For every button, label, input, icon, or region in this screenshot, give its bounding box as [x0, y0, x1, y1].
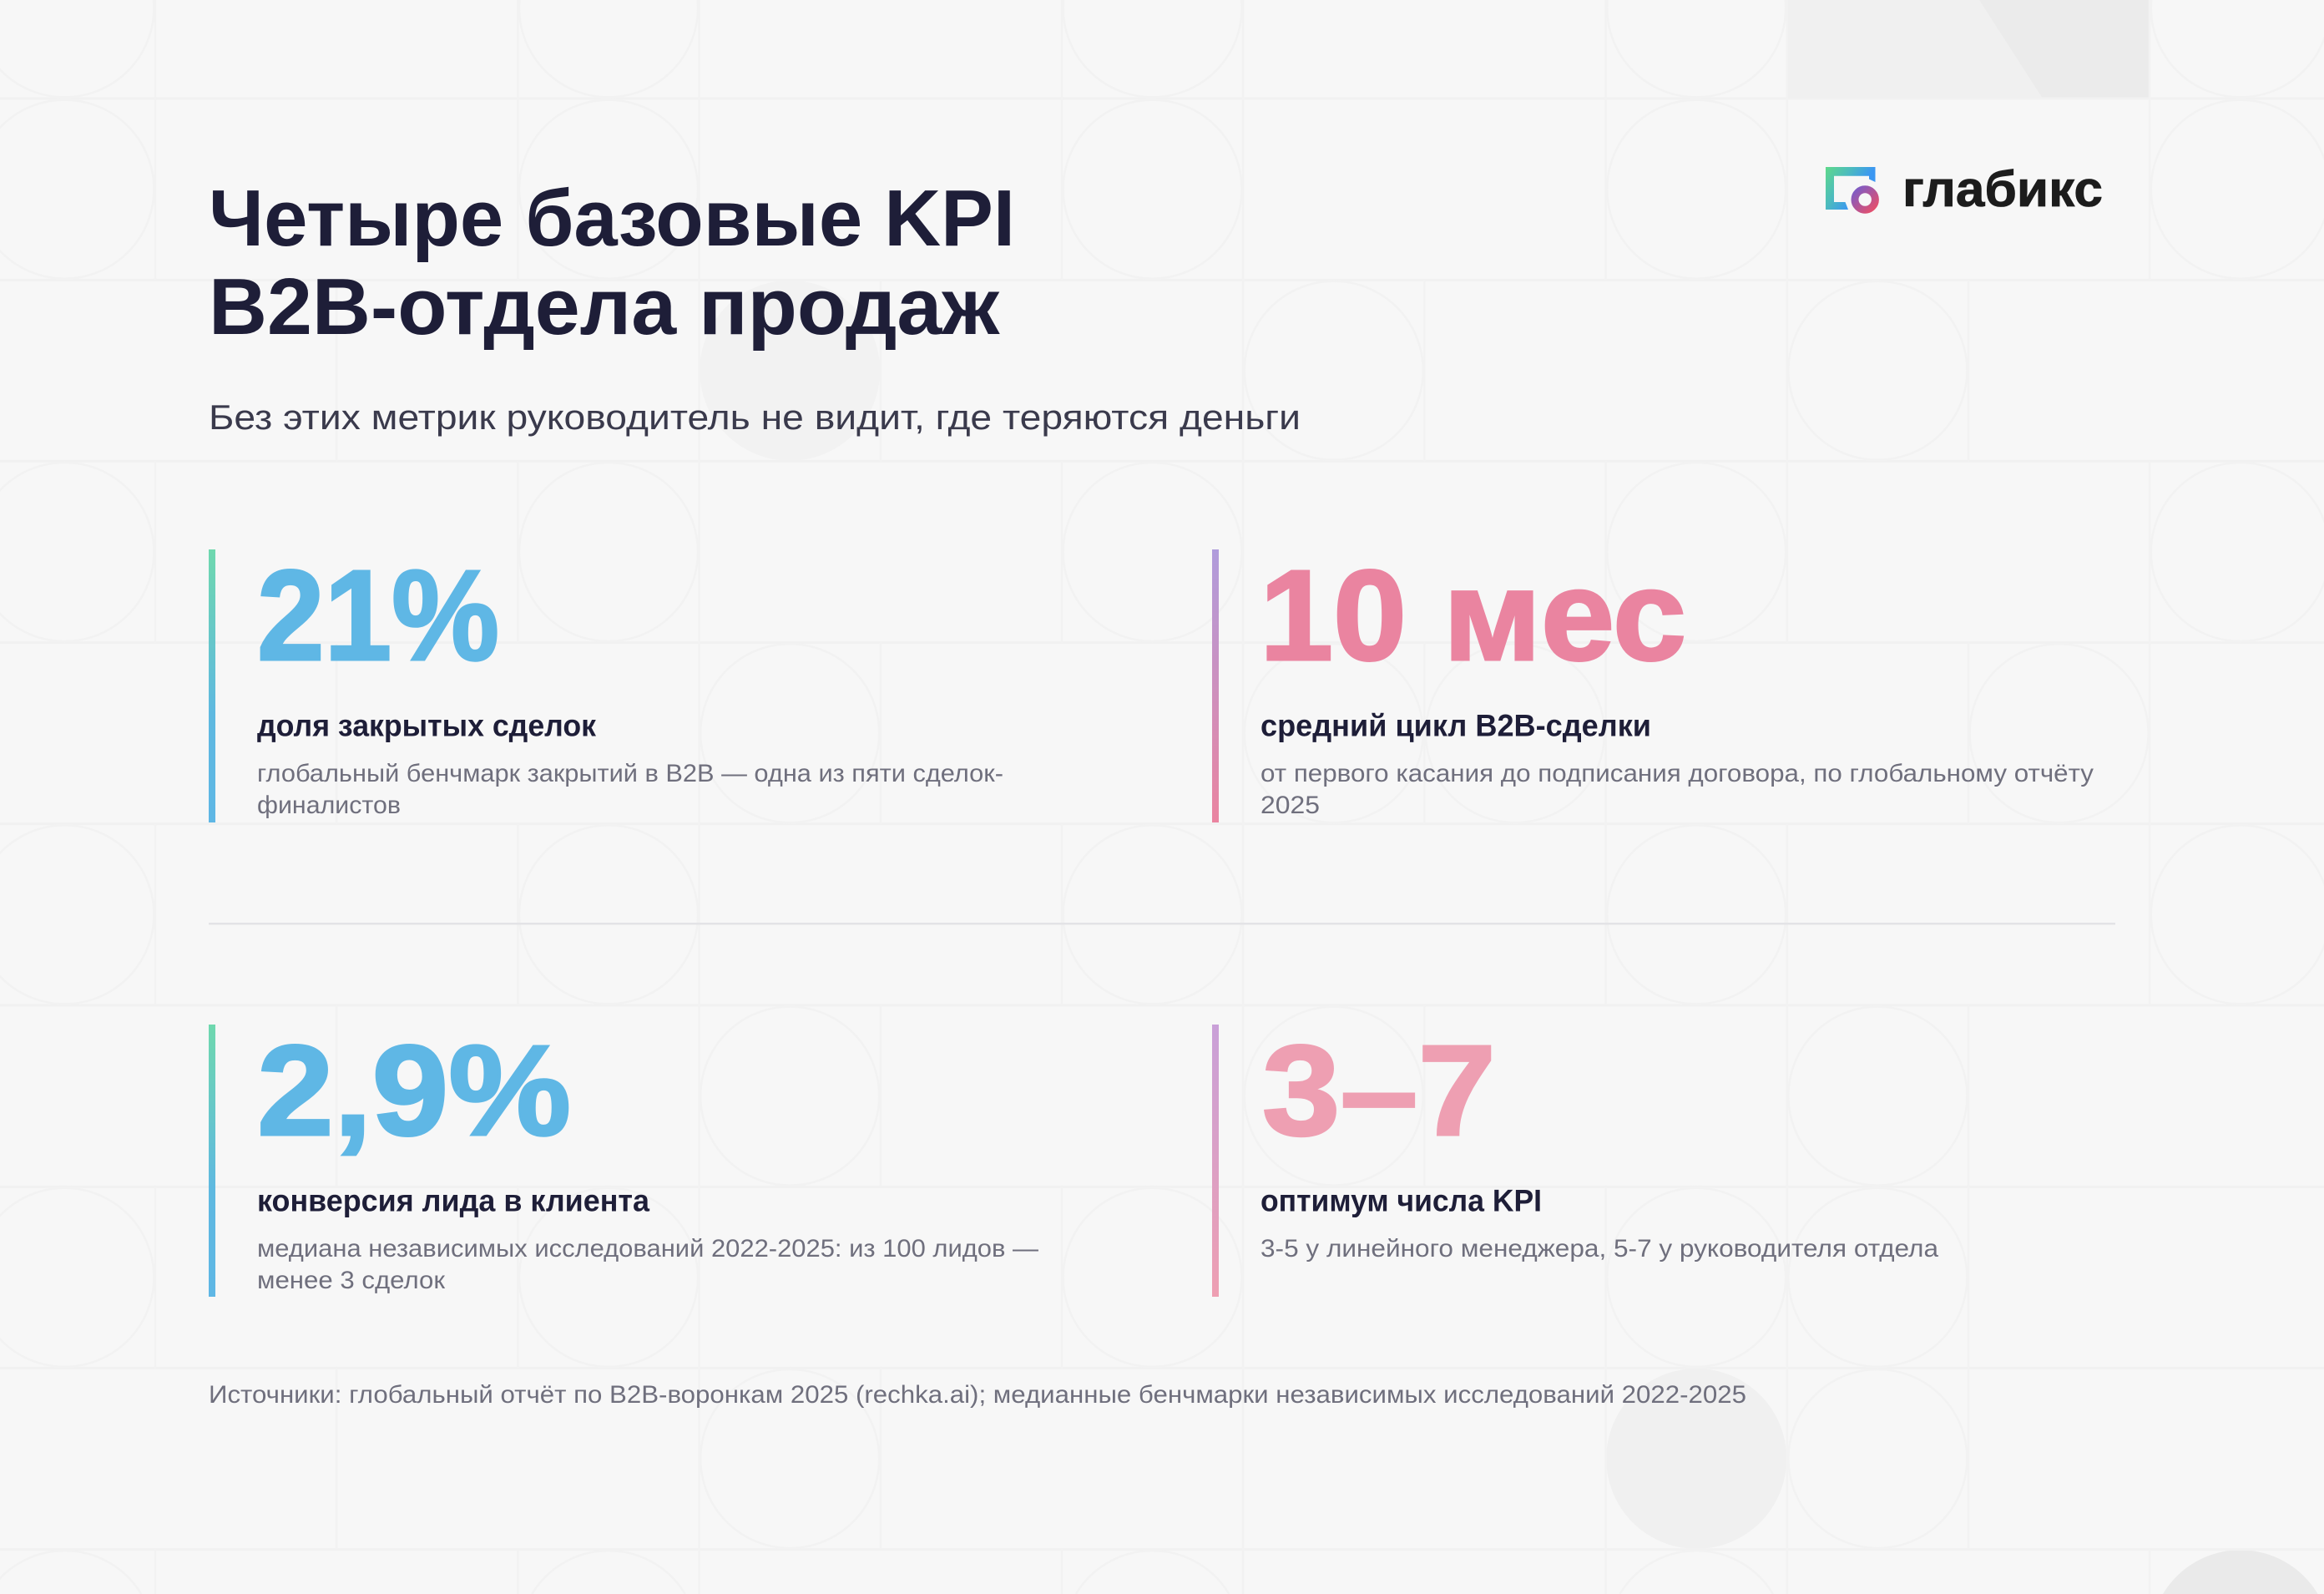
- title: [209, 174, 1015, 352]
- sources note: Источники: глобальный отчёт по B2B-воронкам 2025 (rechka.ai); медианные бенчмарки независимых исследований 2022-2025: [209, 1381, 1746, 1409]
- metric label: средний цикл B2B-сделки: [1261, 708, 1651, 743]
- metric description: от первого касания до подписания договора, по глобальному отчёту: [1261, 760, 2094, 787]
- metric description: [1261, 760, 2094, 819]
- accent bar: [1212, 1025, 1219, 1297]
- metric value: 3–7: [1262, 1019, 1496, 1162]
- panel: deal cycle: [1212, 544, 2094, 822]
- panel: optimal KPI count: [1212, 1019, 1938, 1297]
- title: Четыре базовые KPI: [209, 174, 1015, 263]
- metric description: финалистов: [257, 792, 401, 819]
- metric description: [257, 1235, 1038, 1294]
- logo wordmark: глабикс: [1902, 161, 2103, 217]
- metric value: 21%: [257, 544, 499, 687]
- metric label: доля закрытых сделок: [257, 708, 596, 743]
- metric label: оптимум числа KPI: [1261, 1184, 1542, 1217]
- divider: [209, 923, 2115, 925]
- accent bar: [209, 1025, 215, 1297]
- icon: logo frame and ring: [1826, 167, 1875, 210]
- metric value: 10 мес: [1260, 544, 1686, 687]
- accent bar: [209, 549, 215, 822]
- metric label: конверсия лида в клиента: [257, 1184, 649, 1217]
- accent bar: [1212, 549, 1219, 822]
- metric description: [257, 760, 1003, 819]
- metric description: 3-5 у линейного менеджера, 5-7 у руководителя отдела: [1261, 1235, 1938, 1263]
- logo: [1826, 161, 2103, 217]
- subtitle: Без этих метрик руководитель не видит, где теряются деньги: [209, 397, 1301, 437]
- metric description: глобальный бенчмарк закрытий в B2B — одна из пяти сделок-: [257, 760, 1003, 787]
- title: B2B-отдела продаж: [209, 262, 1000, 352]
- metric value: 2,9%: [257, 1019, 571, 1162]
- panel: lead conversion: [209, 1019, 1038, 1297]
- metric description: 2025: [1261, 792, 1320, 819]
- metric description: менее 3 сделок: [257, 1267, 446, 1294]
- metric description: медиана независимых исследований 2022-2025: из 100 лидов —: [257, 1235, 1038, 1263]
- panel: closed deals: [209, 544, 1003, 822]
